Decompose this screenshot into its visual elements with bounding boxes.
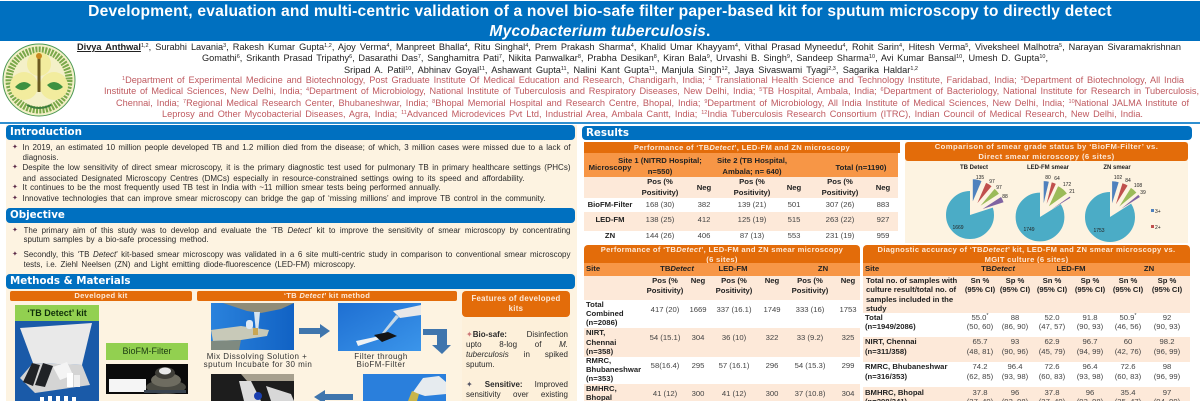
panel heading: Comparison of smear grade status by ‘BioFM-Filter’ vs.: [935, 142, 1158, 151]
table: diagnostic accuracy: study: [866, 304, 887, 313]
pie: LED-FM smear: [1023, 165, 1075, 233]
text block: objective: ✦: [12, 251, 18, 258]
table: performance two sites: Site 1 (NITRD Hospital;: [618, 156, 702, 165]
image: mix dissolving solution: [211, 303, 294, 350]
table: diagnostic accuracy: BMHRC, Bhopal: [865, 388, 924, 397]
table: performance six sites: Combined: [586, 309, 624, 318]
table: performance six sites: (n=358): [586, 347, 613, 356]
table: performance two sites: Pos (%: [647, 177, 673, 186]
table: performance two sites: 406: [698, 231, 710, 240]
text block: introduction: ✦: [12, 184, 18, 191]
table: diagnostic accuracy: Sn %: [1119, 276, 1137, 285]
table: diagnostic accuracy: [863, 245, 1190, 401]
table: performance six sites: 54 (15.1): [650, 333, 680, 342]
table: performance two sites: [584, 142, 900, 244]
arrow: step one to two: [299, 324, 330, 338]
table heading: Performance of ‘TBDetect’, LED-FM and ZN microscopy: [634, 143, 850, 152]
table: performance six sites: Pos (%: [797, 276, 823, 285]
text block: features: sputum.: [466, 360, 494, 369]
table: diagnostic accuracy: (42, 76): [1115, 347, 1141, 356]
text block: features: upto 8-log of M.: [466, 340, 568, 349]
pie: TB Detect: 88: [1002, 194, 1008, 200]
table: performance six sites: 300: [692, 389, 704, 398]
table: performance two sites: 501: [788, 200, 800, 209]
table: diagnostic accuracy: (93, 98): [1002, 372, 1028, 381]
pie: ZN smear: 102: [1114, 175, 1122, 181]
table: performance six sites: Pos (%: [652, 276, 678, 285]
table: diagnostic accuracy: (47, 57): [1039, 322, 1065, 331]
table: performance two sites: Microscopy: [589, 163, 631, 172]
table: performance two sites: Site 2 (TB Hospital,: [717, 156, 787, 165]
table: performance six sites: Chennai: [586, 338, 616, 347]
table: performance two sites: 168 (30): [646, 200, 674, 209]
heading: developed kit: [10, 291, 192, 301]
table: performance six sites: Positivity): [716, 286, 752, 295]
table: diagnostic accuracy: 65.7: [973, 337, 987, 346]
table: diagnostic accuracy: Site: [865, 264, 879, 273]
text block: features: ✦ Sensitive: Improved: [466, 380, 568, 389]
table: performance six sites: RMRC,: [586, 356, 611, 365]
image: dropper on slide: [363, 374, 446, 401]
table: diagnostic accuracy: (50, 60): [967, 322, 993, 331]
table: performance two sites: Positivity): [642, 188, 678, 197]
text block: introduction: and associated Designated Microscopy Centres (DMCs) especially in resource-constrained settings owing to its speed and affordability.: [22, 174, 524, 183]
author list: Sripad A. Patil10, Abhinav Goyal11, Ashawant Gupta11, Nalini Kant Gupta11, Manjula Singh12, Jaya Sivaswami Tyagi2,3, Sagarika Haldar1,2: [344, 65, 918, 75]
table: diagnostic accuracy: 55.0*: [971, 313, 989, 322]
panel heading: [905, 142, 1188, 161]
table: performance two sites: Positivity): [734, 188, 770, 197]
table: diagnostic accuracy: (95% CI): [1113, 285, 1143, 294]
legend: 2+: [1155, 225, 1161, 231]
table: diagnostic accuracy: Sn %: [1043, 276, 1061, 285]
table heading: (6 sites): [706, 255, 738, 264]
text block: introduction: ✦: [12, 195, 18, 202]
image: filter through BioFM-Filter: [338, 303, 421, 351]
heading: results: [582, 126, 1192, 140]
table: performance six sites: 58(16.4): [651, 361, 679, 370]
table: performance two sites: Neg: [876, 183, 890, 192]
table: diagnostic accuracy: Sn %: [971, 276, 989, 285]
table: performance six sites: (n=2086): [586, 318, 617, 327]
caption: sputum incubate: sputum Incubate for 30 min: [204, 360, 312, 369]
table: diagnostic accuracy: 91.8: [1083, 313, 1097, 322]
table: performance two sites: Neg: [697, 183, 711, 192]
table: performance six sites: Site: [586, 264, 600, 273]
table: diagnostic accuracy: 88: [1011, 313, 1019, 322]
heading: methods and materials: Methods & Materials: [10, 275, 131, 287]
table: diagnostic accuracy: (90, 93): [1077, 322, 1103, 331]
label: BioFM-Filter: BioFM-Filter: [122, 346, 172, 356]
heading: features: [462, 291, 570, 317]
pie: TB Detect: 97: [996, 185, 1002, 191]
table: diagnostic accuracy: 52.0: [1045, 313, 1059, 322]
text block: features: ✦Bio-safe: Disinfection: [466, 330, 568, 339]
heading: introduction: Introduction: [10, 126, 82, 138]
pie: TB Detect: TB Detect: [960, 165, 988, 171]
table: diagnostic accuracy: ZN: [1144, 264, 1154, 273]
table: performance six sites: LED-FM: [718, 264, 748, 273]
table heading: MGIT culture (6 sites): [985, 255, 1068, 264]
table: performance two sites: 412: [698, 215, 710, 224]
table: diagnostic accuracy: (90, 93): [1154, 322, 1180, 331]
title banner: Development, evaluation and multi-centric validation of a novel bio-safe filter paper-based kit for sputum microscopy to directly detect: [88, 3, 1112, 20]
table: performance six sites: 304: [692, 333, 704, 342]
table: diagnostic accuracy: (46, 56): [1115, 322, 1141, 331]
table heading: Performance of ‘TBDetect’, LED-FM and ZN smear microscopy: [601, 245, 843, 254]
table: diagnostic accuracy: LED-FM: [1056, 264, 1086, 273]
label: TB Detect kit: [15, 305, 99, 321]
table: performance two sites: n=550): [648, 167, 672, 176]
text block: objective: sputum samples by a bio-safe processing method.: [24, 235, 208, 244]
table: performance two sites: Pos (%: [827, 177, 853, 186]
table: performance six sites: 295: [692, 361, 704, 370]
table: diagnostic accuracy: 93: [1011, 337, 1019, 346]
image: microscope: [211, 374, 294, 401]
table: performance six sites: 54 (15.3): [795, 361, 825, 370]
panel: left column background: [6, 125, 577, 401]
affiliations: Chennai, India; 7Regional Medical Research Center, Bhubaneshwar, India; 8Bhopal Memorial Hospital and Research Centre, Bhopal, India; 9Department of Microbiology, All India Institute of Medical Sciences, New Delhi, India; 10National JALMA Institute of: [116, 98, 1189, 108]
table: diagnostic accuracy: (62, 85): [967, 372, 993, 381]
title banner: [0, 1, 1200, 41]
image: BioFM-Filter: [106, 364, 188, 394]
table: diagnostic accuracy: 92: [1163, 313, 1171, 322]
table: performance six sites: (n=353): [586, 374, 613, 383]
text block: objective: The primary aim of this study was to develop and evaluate the ‘TB Detect’ kit to improve the sensitivity of smear microscopy by concentrating: [24, 226, 570, 235]
table: performance six sites: 41 (12): [653, 389, 677, 398]
table: performance two sites: ZN: [605, 231, 615, 240]
table: diagnostic accuracy: 74.2: [973, 362, 987, 371]
table: performance two sites: Total (n=1190): [836, 163, 886, 172]
table: diagnostic accuracy: Total: [865, 313, 883, 322]
heading: features: kits: [509, 304, 523, 313]
table: diagnostic accuracy: 72.6: [1121, 362, 1135, 371]
table: performance six sites: Positivity): [647, 286, 683, 295]
table: diagnostic accuracy: 96: [1086, 388, 1094, 397]
table: performance six sites: Bhubaneshwar: [586, 365, 641, 374]
table: diagnostic accuracy: 97: [1163, 388, 1171, 397]
table: diagnostic accuracy: 96.4: [1083, 362, 1097, 371]
table: performance two sites: 883: [877, 200, 889, 209]
panel heading: Direct smear microscopy (6 sites): [978, 152, 1115, 161]
text block: features: sensitivity over existing: [466, 390, 568, 399]
text block: objective: tests, i.e. Ziehl Neelsen (ZN) and Light emitting diode-fluorescence (LED-FM) microscopy.: [24, 260, 356, 269]
pie: LED-FM smear: 172: [1063, 182, 1071, 188]
table: diagnostic accuracy: 98.2: [1160, 337, 1174, 346]
table: performance six sites: 33 (9.2): [797, 333, 823, 342]
table: diagnostic accuracy: (95% CI): [1075, 285, 1105, 294]
pie: ZN smear: 39: [1140, 190, 1146, 196]
table: performance two sites: 307 (26): [826, 200, 854, 209]
table: performance six sites: Pos (%: [721, 276, 747, 285]
table: diagnostic accuracy: (n=316/353): [865, 372, 907, 381]
heading: objective: Objective: [10, 209, 65, 221]
table: diagnostic accuracy: (94, 99): [1077, 347, 1103, 356]
table: diagnostic accuracy: 96: [1011, 388, 1019, 397]
table: performance two sites: LED-FM: [595, 215, 625, 224]
affiliations: 1Department of Experimental Medicine and Biotechnology, Post Graduate Institute Of Medical Education and Research, Chandigarh, India; 2 Translational Health Science and Technology Institute, Faridabad, India; 3Department of Biotechnology, All India: [122, 75, 1184, 85]
table: performance two sites: 87 (13): [740, 231, 764, 240]
text block: features: [462, 317, 570, 401]
pie: TB Detect: 1669: [952, 225, 964, 231]
table: diagnostic accuracy: (96, 99): [1154, 372, 1180, 381]
table: performance six sites: 300: [766, 389, 778, 398]
table: performance two sites: 139 (21): [738, 200, 766, 209]
pie charts: [946, 164, 1161, 242]
table: performance six sites: 57 (16.1): [719, 361, 749, 370]
table: diagnostic accuracy: (95% CI): [1037, 285, 1067, 294]
title banner: Mycobacterium tuberculosis.: [489, 23, 711, 40]
table: performance two sites: Ambala; n= 640): [722, 167, 782, 176]
table: performance six sites: [584, 245, 860, 401]
heading: objective: [6, 208, 575, 223]
table: diagnostic accuracy: 62.9: [1045, 337, 1059, 346]
table: performance six sites: 37 (10.8): [795, 389, 825, 398]
table: diagnostic accuracy: (45, 79): [1039, 347, 1065, 356]
table: performance six sites: 325: [842, 333, 854, 342]
table: performance six sites: 333 (16): [796, 305, 824, 314]
table: performance two sites: Pos (%: [739, 177, 765, 186]
table heading: [863, 245, 1190, 264]
heading: results: Results: [586, 127, 629, 139]
heading: TB Detect kit method: [197, 291, 457, 301]
text block: objective: [12, 226, 570, 269]
table: diagnostic accuracy: (60, 83): [1039, 372, 1065, 381]
author list: Gomathi6, Srikanth Prasad Tripathy6, Dasarathi Das7, Sanghamitra Pati7, Nikita Panwalkar8, Prabha Desikan8, Kiran Bala9, Urvashi B. Singh9, Sandeep Sharma10, Avi Kumar Bansal10, Umesh D. Gupta10,: [202, 53, 1048, 63]
pie: LED-FM smear: LED-FM smear: [1027, 165, 1070, 171]
legend: 3+: [1155, 209, 1161, 215]
pie: ZN smear: 1753: [1093, 228, 1105, 234]
table: diagnostic accuracy: (n=311/358): [865, 347, 907, 356]
panel: smear grade comparison: [905, 142, 1188, 243]
table: diagnostic accuracy: NIRT, Chennai: [865, 337, 917, 346]
table heading: Diagnostic accuracy of ‘TBDetect’ kit, LED-FM and ZN smear microscopy vs.: [878, 245, 1175, 254]
table heading: [584, 142, 900, 153]
table: diagnostic accuracy: 96.7: [1083, 337, 1097, 346]
logo: institute emblem: [2, 44, 76, 116]
text block: objective: ✦: [12, 227, 18, 234]
pie: TB Detect: 135: [976, 175, 984, 181]
table: performance six sites: 1669: [689, 305, 707, 314]
table: performance two sites: BioFM-Filter: [588, 200, 632, 209]
arrow: step three to four: [314, 390, 353, 401]
table: performance six sites: TBDetect: [660, 264, 694, 273]
table: performance two sites: 959: [877, 231, 889, 240]
legend: [1151, 209, 1161, 231]
affiliations: [104, 75, 1199, 119]
table: performance two sites: Neg: [787, 183, 801, 192]
table: diagnostic accuracy: culture result/total no. of: [866, 285, 956, 294]
pie: TB Detect: 97: [989, 179, 995, 185]
table: diagnostic accuracy: (93, 98): [1077, 372, 1103, 381]
header rule: [0, 122, 1200, 124]
table: diagnostic accuracy: (48, 81): [967, 347, 993, 356]
table: diagnostic accuracy: (60, 83): [1115, 372, 1141, 381]
pie: LED-FM smear: 80: [1045, 175, 1051, 181]
pie: LED-FM smear: 1749: [1023, 227, 1035, 233]
table: diagnostic accuracy: Total no. of samples with: [866, 276, 957, 285]
table: diagnostic accuracy: 98: [1163, 362, 1171, 371]
caption: BioFM-Filter: BioFM-Filter: [357, 360, 405, 369]
table: performance six sites: Total: [586, 300, 604, 309]
table: diagnostic accuracy: TBDetect: [981, 264, 1015, 273]
table: performance six sites: 1749: [763, 305, 781, 314]
table: diagnostic accuracy: 72.6: [1045, 362, 1059, 371]
arrow: step two to three: [423, 329, 451, 354]
pie: ZN smear: 84: [1125, 178, 1131, 184]
table: diagnostic accuracy: RMRC, Bhubaneshwar: [865, 362, 947, 371]
table: diagnostic accuracy: (95% CI): [1000, 285, 1030, 294]
text block: objective: Secondly, this ‘TB Detect’ kit-based smear microscopy was validated in a 6 site multi-centric study in comparison to conventional smear microscopy: [24, 250, 570, 259]
pie: LED-FM smear: 21: [1069, 189, 1075, 195]
table: performance six sites: NIRT,: [586, 328, 605, 337]
heading: TB Detect kit method: ‘TB Detect’ kit method: [284, 291, 370, 300]
text block: introduction: Despite the low sensitivity of direct smear microscopy, it is the primary diagnostic test used for pulmonary TB in primary healthcare settings (PHCs): [22, 163, 570, 172]
table: performance six sites: 337 (16.1): [716, 305, 752, 314]
heading: features: Features of developed: [471, 294, 561, 303]
text block: introduction: ✦: [12, 164, 18, 171]
table: diagnostic accuracy: (86, 90): [1002, 322, 1028, 331]
table: performance two sites: 263 (22): [826, 215, 854, 224]
table: performance two sites: 553: [788, 231, 800, 240]
table: performance six sites: 41 (12): [722, 389, 746, 398]
text block: introduction: It continues to be the most frequently used TB test in India with ~11 million smear tests being performed annually.: [22, 183, 440, 192]
text block: introduction: ✦: [12, 144, 18, 151]
pie: TB Detect: [952, 165, 1008, 231]
table: diagnostic accuracy: samples included in the: [866, 295, 953, 304]
heading: methods and materials: [6, 274, 575, 289]
panel: features of developed kits: [462, 291, 570, 399]
table: diagnostic accuracy: Sp %: [1081, 276, 1099, 285]
heading: introduction: [6, 125, 575, 140]
table: performance two sites: 382: [698, 200, 710, 209]
pie: ZN smear: [1093, 165, 1146, 234]
table: diagnostic accuracy: (n=1949/2086): [865, 322, 916, 331]
author list: [77, 42, 1181, 75]
table: performance two sites: 231 (19): [826, 231, 854, 240]
table: performance two sites: 515: [788, 215, 800, 224]
table: diagnostic accuracy: 60: [1124, 337, 1132, 346]
table: diagnostic accuracy: Sp %: [1006, 276, 1024, 285]
table: performance six sites: 36 (10): [722, 333, 746, 342]
label: TB Detect kit: ‘TB Detect’ kit: [27, 308, 87, 318]
pie: LED-FM smear: 64: [1054, 176, 1060, 182]
table: diagnostic accuracy: 50.9*: [1119, 313, 1137, 322]
table: performance six sites: 1753: [839, 305, 857, 314]
table: performance six sites: ZN: [818, 264, 828, 273]
pie: ZN smear: ZN smear: [1103, 165, 1131, 171]
table: diagnostic accuracy: 37.8: [1045, 388, 1059, 397]
caption: filter through: Filter through: [354, 352, 408, 360]
table: performance six sites: Neg: [841, 276, 855, 285]
label: BioFM-Filter: [106, 343, 188, 360]
table: diagnostic accuracy: (90, 96): [1002, 347, 1028, 356]
table: diagnostic accuracy: (95% CI): [965, 285, 995, 294]
table: diagnostic accuracy: Sp %: [1158, 276, 1176, 285]
table: performance six sites: Neg: [691, 276, 705, 285]
table: performance six sites: Neg: [765, 276, 779, 285]
text block: introduction: In 2019, an estimated 10 million people developed TB and 1.2 million died from the disease; of which, 3 million cases were missed due to a lack of: [22, 143, 570, 152]
text block: introduction: diagnosis.: [22, 153, 59, 162]
table: performance two sites: 125 (19): [738, 215, 766, 224]
table: diagnostic accuracy: 35.4: [1121, 388, 1135, 397]
text block: introduction: Innovative technologies that can improve smear microscopy can bridge the gap of ‘missing millions’ and improve TB control in the community.: [22, 194, 546, 203]
text block: features: tuberculosis in spiked: [466, 350, 568, 359]
table: performance six sites: 304: [842, 389, 854, 398]
table: performance two sites: 144 (26): [646, 231, 674, 240]
table: diagnostic accuracy: 96.4: [1008, 362, 1022, 371]
table: performance six sites: 296: [766, 361, 778, 370]
table: performance two sites: Positivity): [822, 188, 858, 197]
text block: introduction: [12, 143, 570, 203]
table: performance six sites: 417 (20): [651, 305, 679, 314]
table: performance six sites: 299: [842, 361, 854, 370]
table: diagnostic accuracy: (95% CI): [1152, 285, 1182, 294]
table: performance six sites: Positivity): [792, 286, 828, 295]
heading: developed kit: Developed kit: [74, 291, 128, 300]
image: TB Detect kit box: [15, 321, 99, 401]
table: performance six sites: BMHRC,: [586, 384, 617, 393]
caption: mix dissolving solution: Mix Dissolving Solution +: [207, 352, 307, 360]
table: diagnostic accuracy: 37.8: [973, 388, 987, 397]
table: performance two sites: 927: [877, 215, 889, 224]
table: performance two sites: 138 (25): [646, 215, 674, 224]
author list: Divya Anthwal1,2, Surabhi Lavania3, Rakesh Kumar Gupta1,2, Ajoy Verma4, Manpreet Bhalla4, Ritu Singhal4, Prem Prakash Sharma4, Khalid Umar Khayyam4, Vithal Prasad Myneedu4, Rohit Sarin4, Hitesh Verma5, Viveksheel Malhotra5, Narayan Sivaramakrishnan: [77, 42, 1181, 52]
table heading: [584, 245, 860, 264]
affiliations: Leprosy and Other Mycobacterial Diseases, Agra, India; 11Advanced Microdevices Pvt Ltd, Industrial Area, Ambala Cantt, India; 12India Tuberculosis Research Consortium (ITRC), Indian Council of Medical Research, New Delhi, India.: [162, 109, 1143, 119]
affiliations: Institute of Medical Sciences, New Delhi, India; 4Department of Microbiology, National Institute of Tuberculosis and Respiratory Diseases, New Delhi, India; 5TB Hospital, Ambala, India; 6Department of Bacteriology, National Institute for Research in Tuberculosis,: [104, 86, 1199, 96]
table: diagnostic accuracy: (96, 99): [1154, 347, 1180, 356]
pie: ZN smear: 108: [1134, 183, 1142, 189]
table: performance six sites: 322: [766, 333, 778, 342]
